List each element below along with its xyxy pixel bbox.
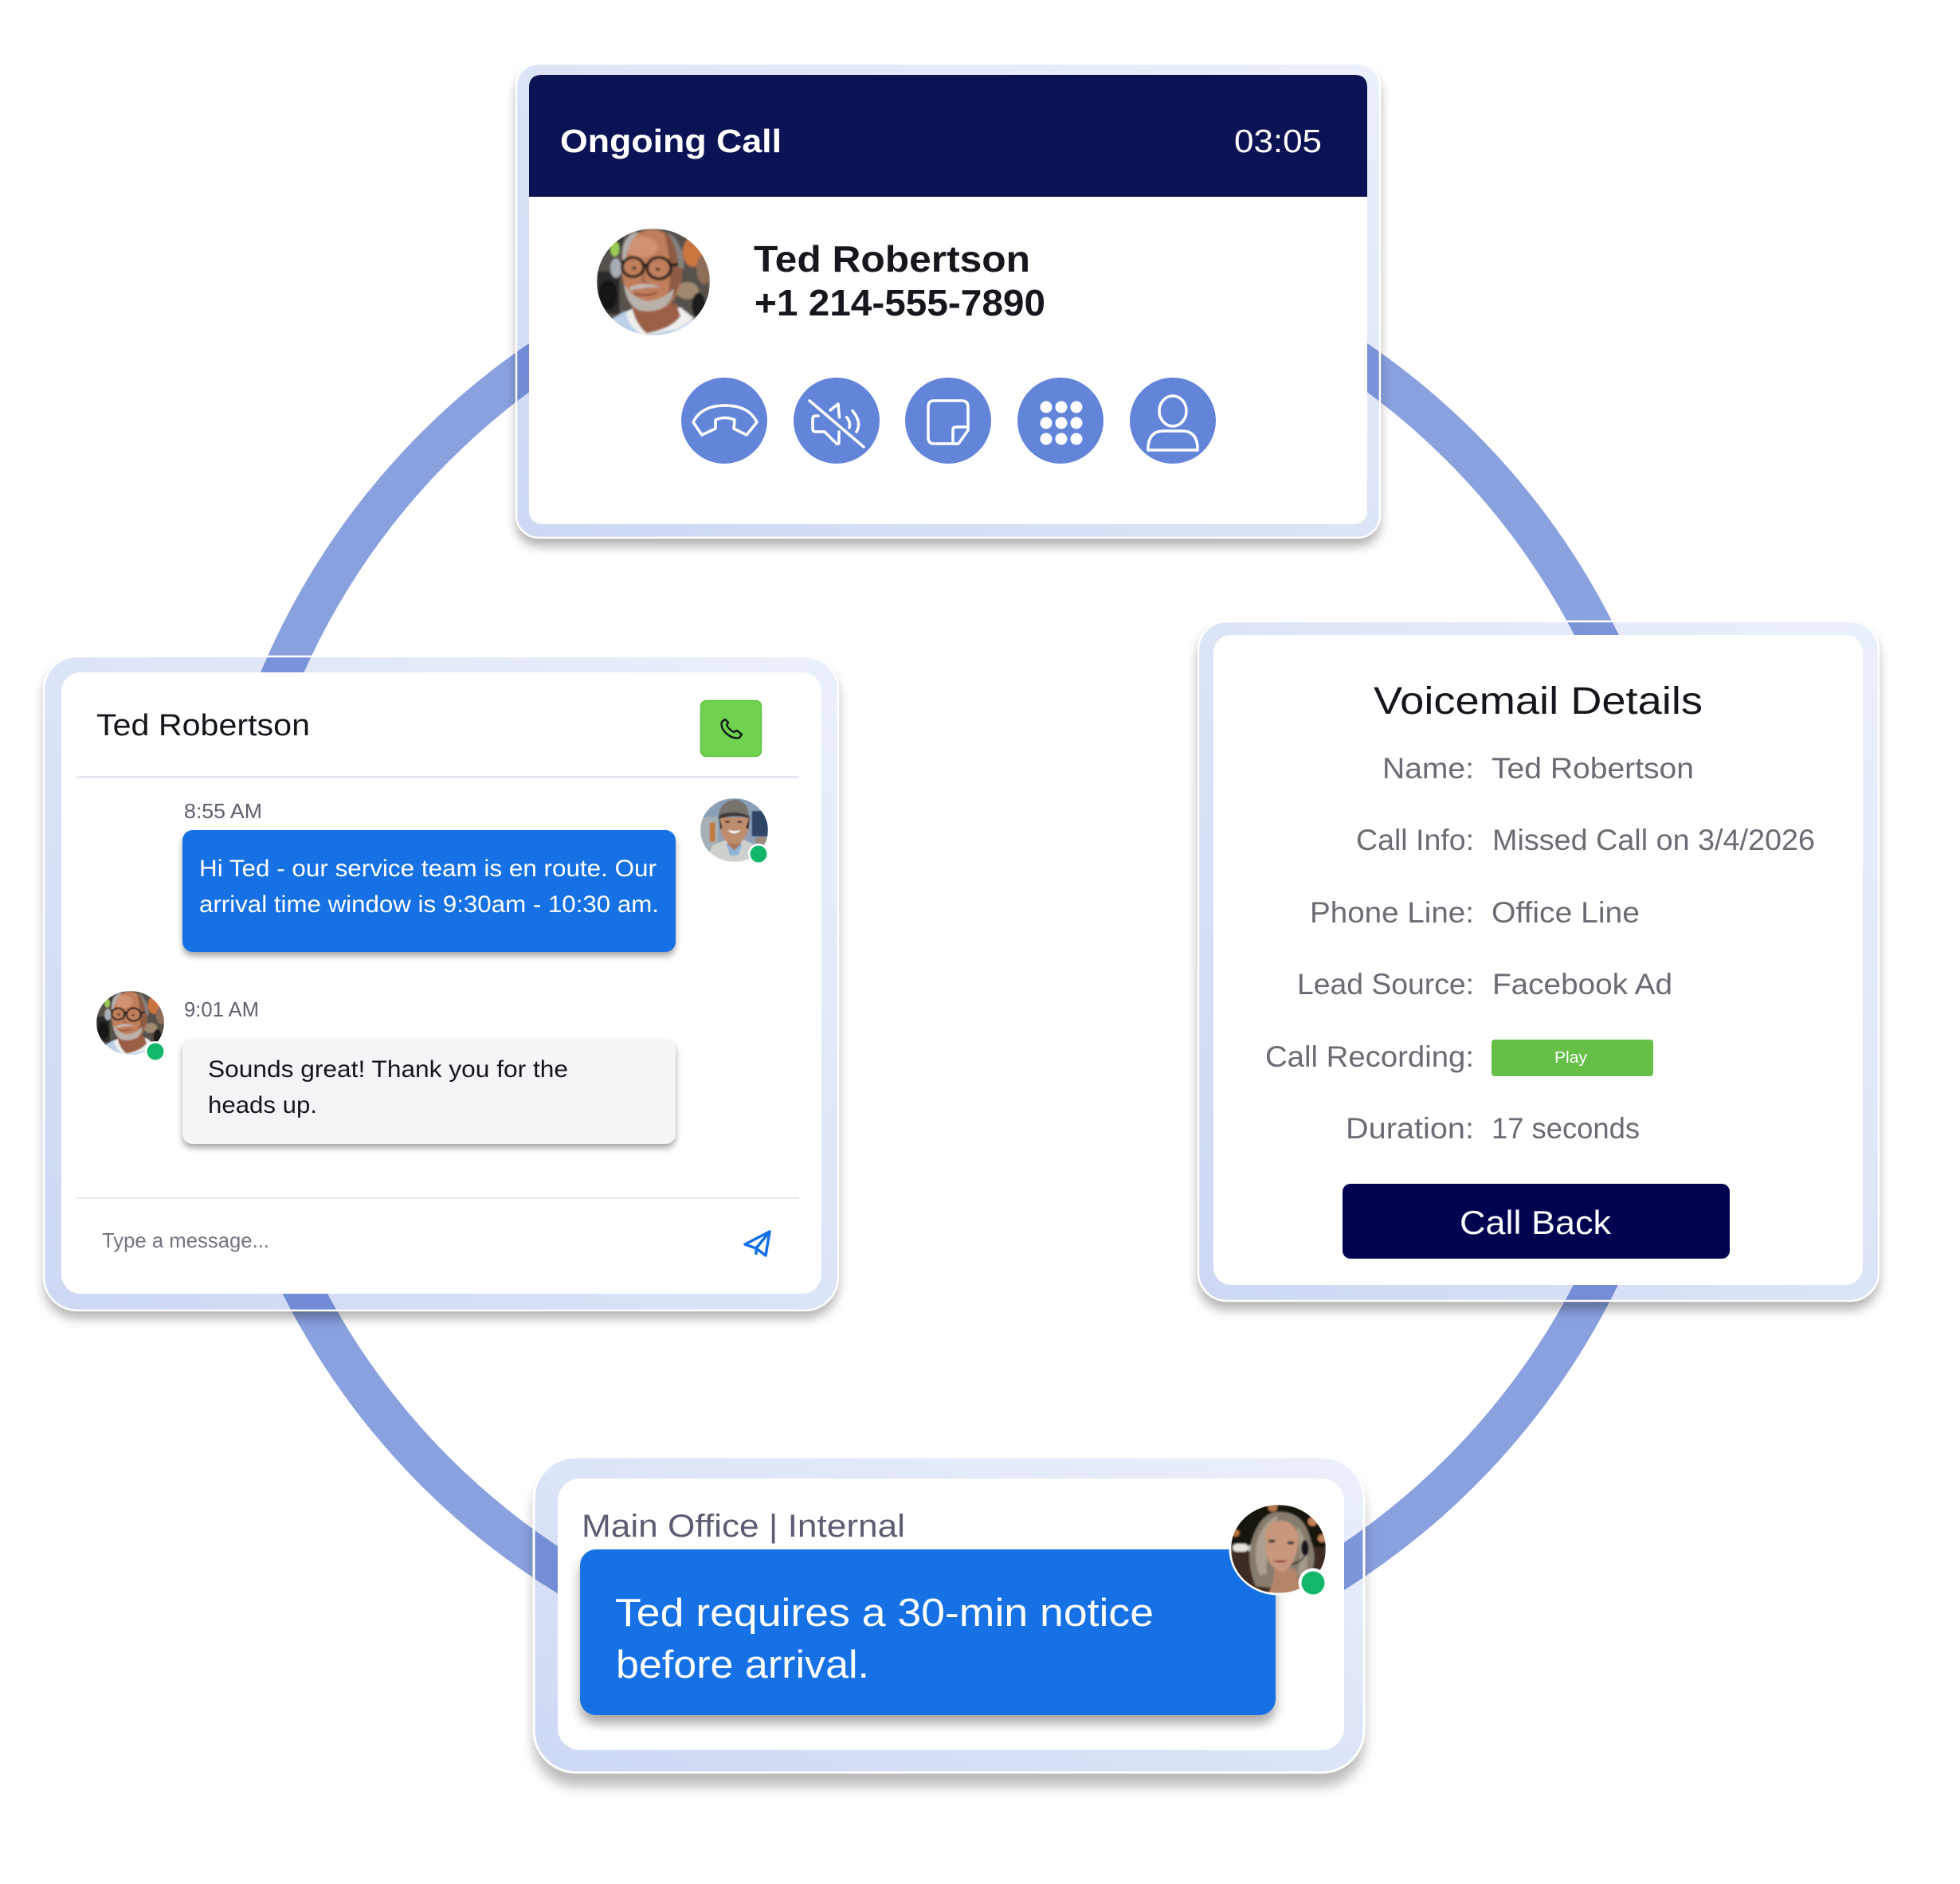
sent message bubble: arrival time window is 9:30am - 10:30 am. [199,891,659,918]
details: phone line [1310,896,1640,929]
voicemail title: Voicemail Details [1374,680,1703,723]
play button [1492,1040,1653,1076]
icon: contact [1130,378,1216,464]
icon: hang up [681,378,767,464]
play button: Play [1554,1049,1587,1067]
connecting ring [223,234,1673,1684]
details: call info: Call Info: [1356,824,1474,856]
sent message bubble: Hi Ted - our service team is en route. Our [199,856,657,882]
details: lead source [1297,968,1672,1001]
details: phone line: Office Line [1492,896,1640,929]
reply bubble [182,1039,676,1144]
note bubble: Ted requires a 30-min notice [615,1592,1154,1635]
sent message bubble [182,830,676,952]
panel: voicemail details [1198,621,1879,1310]
details: duration: Duration: [1346,1112,1474,1145]
caller name and number [754,238,1045,323]
details: call info: Missed Call on 3/4/2026 [1492,824,1815,856]
note bubble [580,1549,1276,1715]
icon: send [745,1232,770,1255]
icon: agent avatar [1229,1502,1327,1598]
details: name: Ted Robertson [1492,752,1694,785]
icon: green call button [701,701,762,757]
sent message timestamp: 8:55 AM [184,799,262,823]
details: lead source: Lead Source: [1297,968,1474,1001]
icon: mute [794,378,880,464]
details: call info [1356,824,1815,856]
call header bar [529,75,1367,197]
reply bubble: heads up. [208,1092,317,1118]
panel: ongoing call [516,64,1380,546]
caller name and number: Ted Robertson [754,238,1030,280]
icon: technician avatar [700,798,769,864]
details: name: Name: [1382,752,1474,785]
details: duration: 17 seconds [1492,1112,1640,1145]
reply timestamp: 9:01 AM [184,997,259,1021]
details: call recording: Call Recording: [1265,1040,1474,1073]
reply bubble: Sounds great! Thank you for the [208,1056,568,1083]
caller name and number: +1 214-555-7890 [755,282,1045,323]
contact name: Ted Robertson [96,709,310,742]
icon: caller photo [597,229,710,335]
message input placeholder: Type a message... [102,1228,269,1252]
icon: Ted avatar [96,991,166,1062]
call header bar: 03:05 [1234,123,1322,159]
details: phone line: Phone Line: [1310,896,1474,929]
call back button [1343,1184,1730,1259]
note bubble: before arrival. [616,1643,869,1686]
details: duration [1346,1112,1640,1145]
details: lead source: Facebook Ad [1492,968,1672,1001]
call header bar: Ongoing Call [560,123,782,159]
icon: note [905,378,991,464]
call back button: Call Back [1460,1204,1612,1241]
channel label: Main Office | Internal [582,1509,905,1544]
panel: text conversation [44,656,838,1318]
details: name [1382,752,1694,785]
panel: internal note [534,1457,1364,1786]
icon: keypad [1017,378,1103,464]
